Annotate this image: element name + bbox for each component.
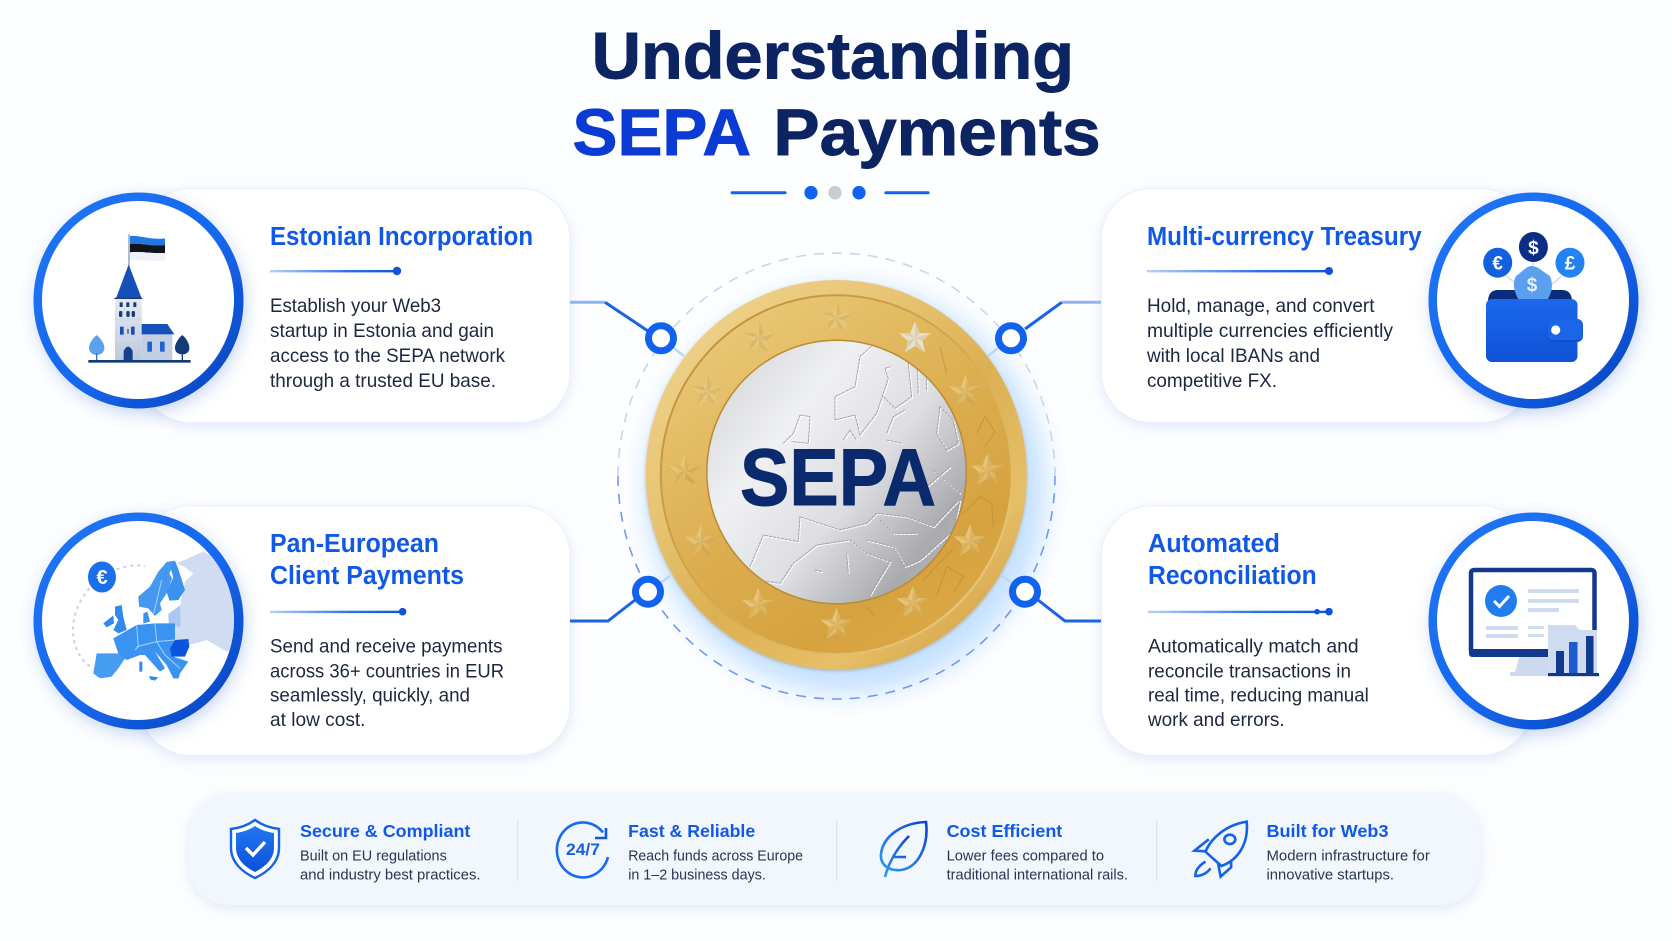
coin label: SEPA xyxy=(740,433,936,523)
panel: estonian incorporation xyxy=(140,188,570,422)
connector stubs behind coin xyxy=(648,338,1025,592)
icon: rocket xyxy=(1194,822,1247,877)
euro coin: € xyxy=(1492,254,1503,274)
feature: secure and compliant: Built on EU regulations xyxy=(300,848,447,865)
gold ring xyxy=(646,280,1027,669)
ground xyxy=(88,360,191,363)
church illustration xyxy=(88,234,191,363)
flag xyxy=(128,234,165,266)
heading: pan-european client payments: Client Payments xyxy=(270,562,464,590)
bar chart on folder xyxy=(1548,625,1599,676)
title xyxy=(572,18,1101,169)
heading: automated reconciliation xyxy=(1148,530,1317,590)
stars xyxy=(669,301,1004,639)
heading: pan-european client payments xyxy=(270,530,464,590)
check badge xyxy=(1485,585,1517,617)
silver centre xyxy=(706,340,967,604)
feature: fast and reliable xyxy=(557,821,803,883)
body text: through a trusted EU base. xyxy=(270,370,496,392)
underline xyxy=(270,608,406,616)
body text xyxy=(270,295,505,392)
feature: built for web3: Built for Web3 xyxy=(1266,821,1389,841)
icon circle: europe map xyxy=(34,512,247,730)
wallet clasp xyxy=(1547,319,1583,342)
coin glow xyxy=(646,286,1046,694)
title: Payments xyxy=(773,95,1101,169)
dollar coin xyxy=(1519,232,1548,262)
monitor xyxy=(1469,570,1596,676)
underline xyxy=(270,267,401,275)
panel: multi-currency treasury xyxy=(1102,188,1532,422)
icon circle: wallet with currencies xyxy=(1428,192,1638,408)
panel: automated reconciliation xyxy=(1102,506,1532,755)
heading: automated reconciliation: Reconciliation xyxy=(1148,562,1317,590)
wallet back xyxy=(1488,290,1572,320)
underline xyxy=(1147,267,1333,275)
wallet body xyxy=(1486,299,1578,362)
body text: with local IBANs and xyxy=(1146,345,1320,367)
heading: pan-european client payments: Pan-European xyxy=(270,530,439,558)
pound coin xyxy=(1556,248,1584,278)
body text xyxy=(270,636,504,731)
feature: fast and reliable: Fast & Reliable xyxy=(628,821,755,841)
feature: secure and compliant xyxy=(231,820,480,883)
body text: Establish your Web3 xyxy=(270,295,441,317)
icon circle: estonian church xyxy=(34,192,244,408)
map of europe xyxy=(93,552,247,681)
panel: feature bar xyxy=(189,793,1480,905)
body text: multiple currencies efficiently xyxy=(1147,320,1393,342)
connector: bottom right xyxy=(1012,579,1101,621)
feature: cost efficient: Lower fees compared to xyxy=(947,848,1104,865)
connector: top right xyxy=(998,302,1101,351)
europe relief xyxy=(743,333,961,596)
feature: built for web3: Modern infrastructure for xyxy=(1266,848,1430,865)
body text: work and errors. xyxy=(1147,709,1285,731)
icon: shield xyxy=(231,820,279,878)
heading: estonian incorporation: Estonian Incorporation xyxy=(270,223,533,251)
feature: cost efficient: traditional international rails. xyxy=(947,866,1128,883)
icon: leaf xyxy=(881,822,926,877)
dividers xyxy=(517,820,1157,881)
panel: pan-european client payments xyxy=(140,506,570,755)
title: SEPA xyxy=(572,95,751,169)
dashed orbit xyxy=(618,253,1055,699)
feature: cost efficient: Cost Efficient xyxy=(947,821,1062,841)
feature: fast and reliable: Reach funds across Europe xyxy=(628,848,803,865)
body text: at low cost. xyxy=(270,709,366,731)
coin tethers xyxy=(1505,262,1562,285)
euro badge xyxy=(88,562,116,592)
underline xyxy=(1148,608,1333,616)
church nave xyxy=(142,324,174,360)
body text xyxy=(1146,295,1393,392)
text lines xyxy=(1486,589,1579,638)
feature: cost efficient xyxy=(881,821,1128,883)
feature: built for web3 xyxy=(1194,821,1430,883)
body text: Hold, manage, and convert xyxy=(1147,295,1375,317)
church tower xyxy=(114,264,142,360)
feature: built for web3: innovative startups. xyxy=(1266,866,1394,883)
coin: sepa xyxy=(646,280,1027,669)
gold relief xyxy=(867,347,995,617)
dotted orbit xyxy=(73,565,145,667)
heading: automated reconciliation: Automated xyxy=(1148,530,1280,558)
center coin xyxy=(1514,266,1552,302)
connector: top left xyxy=(570,302,674,351)
body text: seamlessly, quickly, and xyxy=(270,685,470,707)
body text: Send and receive payments xyxy=(270,636,503,658)
center coin: $ xyxy=(1527,275,1538,296)
feature: secure and compliant: Secure & Compliant xyxy=(300,821,471,841)
title: Understanding xyxy=(592,18,1074,92)
trees xyxy=(89,335,189,360)
body text: access to the SEPA network xyxy=(270,345,505,367)
body text: startup in Estonia and gain xyxy=(270,320,494,342)
title divider with dots xyxy=(731,186,930,200)
euro badge: € xyxy=(96,567,108,589)
body text: across 36+ countries in EUR xyxy=(270,661,504,683)
icon: 24/7 clock arrow: 24/7 xyxy=(566,840,600,859)
pound coin: £ xyxy=(1565,254,1576,274)
body text: real time, reducing manual xyxy=(1148,685,1369,707)
body text xyxy=(1147,636,1369,731)
feature: fast and reliable: in 1–2 business days. xyxy=(628,866,766,883)
heading: multi-currency treasury: Multi-currency Treasury xyxy=(1147,223,1422,251)
body text: Automatically match and xyxy=(1148,636,1359,658)
body text: competitive FX. xyxy=(1147,370,1277,392)
feature: secure and compliant: and industry best practices. xyxy=(300,866,480,883)
dollar coin: $ xyxy=(1528,238,1539,259)
body text: reconcile transactions in xyxy=(1148,661,1351,683)
connector: bottom left xyxy=(570,579,660,621)
euro coin xyxy=(1483,248,1512,278)
icon circle: monitor with chart xyxy=(1428,512,1638,730)
icon: 24/7 clock arrow xyxy=(557,822,608,877)
